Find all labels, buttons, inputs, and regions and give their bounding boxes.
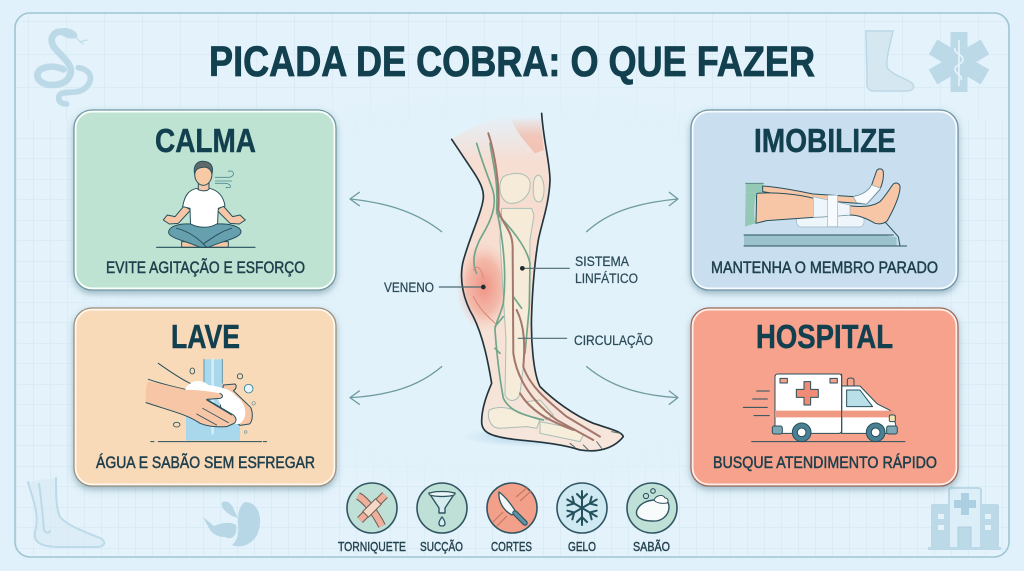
toes	[570, 432, 620, 450]
icon: ice snowflake	[557, 483, 607, 533]
panel: calma	[74, 110, 336, 290]
leg fill	[452, 113, 623, 451]
icon: immobilised leg	[744, 169, 907, 246]
row: what not to do	[338, 483, 677, 554]
watermark: star of life	[929, 32, 989, 92]
watermark: hospital	[928, 488, 1001, 550]
muscle at top of the thigh	[512, 117, 544, 153]
panel: lave	[74, 308, 336, 486]
central leg anatomy illustration	[350, 113, 678, 451]
watermark: foot top right	[866, 31, 914, 91]
heading: hospital: HOSPITAL	[756, 318, 893, 355]
label: veneno: VENENO	[384, 280, 434, 295]
caption: calma: EVITE AGITAÇÃO E ESFORÇO	[106, 257, 305, 277]
icon: ambulance	[743, 374, 905, 442]
pointer: circulação	[518, 337, 567, 340]
label: torniquete: TORNIQUETE	[338, 539, 406, 554]
heading: lave: LAVE	[171, 318, 240, 355]
pointer dot: veneno	[481, 285, 486, 289]
panel: imobilize	[691, 110, 958, 290]
caption: imobilize: MANTENHA O MEMBRO PARADO	[711, 259, 938, 277]
leg contour lines	[452, 113, 623, 451]
icon: washing hands	[146, 359, 267, 442]
arrow: to hospital	[587, 367, 678, 404]
label: circulação: CIRCULAÇÃO	[574, 333, 653, 348]
bones of the leg and foot	[488, 173, 583, 442]
arrow: to calma	[350, 192, 442, 232]
pointer dot: sistema linfático	[520, 266, 525, 271]
venom swelling	[456, 242, 512, 332]
heading: imobilize: IMOBILIZE	[754, 122, 896, 159]
label: sistema linfático: SISTEMA	[575, 254, 629, 269]
label: sabão: SABÃO	[633, 539, 670, 554]
arrow: to imobilize	[587, 192, 678, 232]
label: gelo: GELO	[568, 539, 596, 554]
lymph vessels	[474, 143, 543, 420]
label: sistema linfático: LINFÁTICO	[575, 271, 638, 286]
watermark: foot bottom left	[28, 478, 104, 547]
arrow: to lave	[350, 367, 442, 404]
icon: meditating person	[157, 161, 255, 247]
watermark: organ shape	[203, 501, 260, 546]
icon: knife cuts	[487, 483, 537, 533]
icon: tourniquet	[347, 483, 397, 533]
watermark: snake	[37, 26, 90, 104]
heading: calma: CALMA	[155, 122, 256, 159]
icon: suction funnel	[417, 483, 467, 533]
pointer: sistema linfático	[522, 267, 569, 270]
label: cortes: CORTES	[491, 539, 532, 554]
label: sucção: SUCÇÃO	[420, 539, 463, 554]
pointer: veneno	[439, 285, 483, 289]
icon: soap	[627, 483, 677, 533]
title: PICADA DE COBRA: O QUE FAZER	[209, 38, 815, 86]
caption: lave: ÁGUA E SABÃO SEM ESFREGAR	[96, 452, 315, 472]
caption: hospital: BUSQUE ATENDIMENTO RÁPIDO	[713, 453, 937, 472]
panel: hospital	[691, 308, 958, 486]
blood vessels	[473, 133, 600, 440]
